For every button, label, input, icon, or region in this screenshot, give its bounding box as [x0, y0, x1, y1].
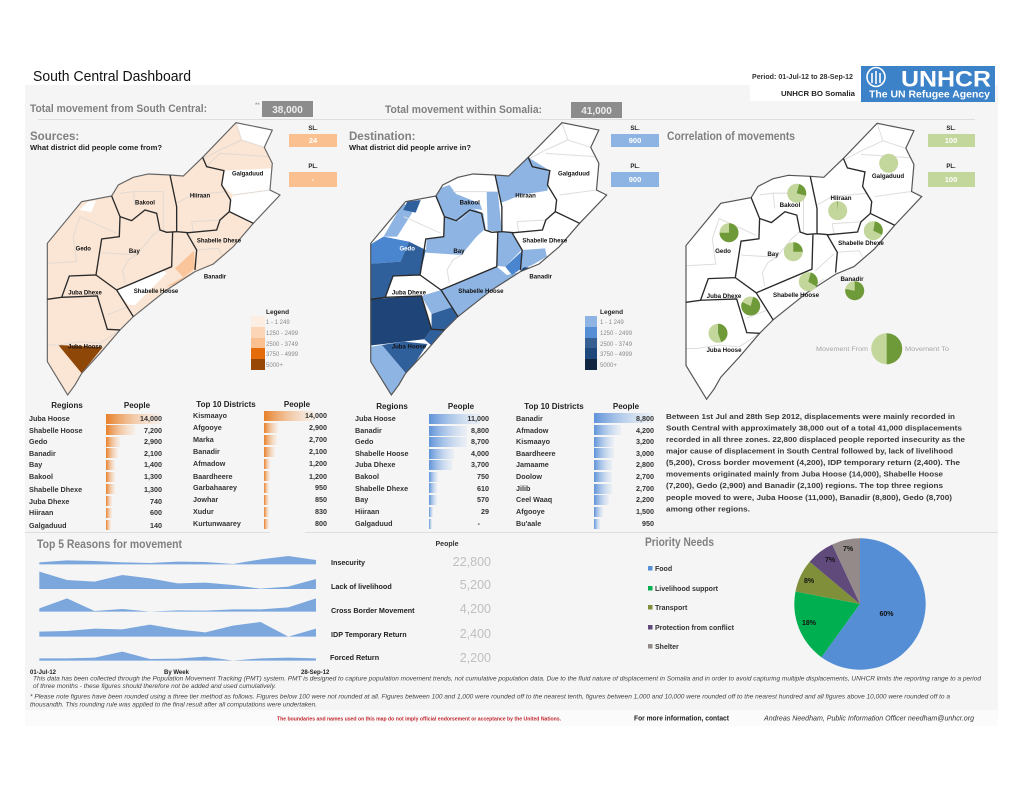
map: destination: Shabelle Dhexe	[522, 238, 568, 244]
table: source regions: People	[124, 401, 151, 410]
map: sources: Shabelle Dhexe	[197, 238, 242, 244]
contact information	[634, 714, 974, 722]
table: destination districts: Banadir	[516, 414, 543, 423]
summary paragraph: recorded in all three zones. 22,800 displaced people reported insecurity as the	[666, 435, 965, 444]
summary paragraph	[666, 412, 965, 514]
map: sources: Bakool	[135, 201, 155, 207]
table: destination districts: Ceel Waaq	[516, 495, 552, 504]
contact information: Andreas Needham, Public Information Officer needham@unhcr.org	[763, 716, 974, 722]
heading: top 5 reasons: Top 5 Reasons for movement	[37, 539, 182, 551]
total movement from South Central: 38,000	[272, 105, 303, 116]
table: source districts	[193, 400, 327, 529]
map legend: sources: 5000+	[266, 363, 283, 369]
table: destination districts: Jamaame	[516, 460, 549, 469]
table: source regions: 14,000	[140, 414, 162, 423]
table: source districts: Afgooye	[193, 423, 222, 432]
table: source districts: 14,000	[305, 411, 327, 420]
map legend: sources: 3750 - 4999	[266, 352, 299, 358]
priority needs legend: Transport	[655, 605, 688, 612]
correlation map labels: Shabelle Hoose	[773, 292, 820, 299]
table: destination districts: 950	[642, 519, 654, 528]
table: source districts: Marka	[193, 435, 215, 444]
table: destination districts: Afgooye	[516, 507, 545, 516]
map: destination: Bakool	[460, 201, 480, 207]
correlation map labels: Hiiraan	[831, 195, 852, 202]
summary paragraph: people moved to were, Juba Hoose (11,000), Banadir (8,800), Gedo (8,700)	[666, 493, 953, 502]
priority needs legend: Food	[655, 566, 672, 573]
table: destination districts: 2,800	[636, 460, 654, 469]
footnotes: of three months - these figures should therefore not be added and used cumulatively.	[33, 683, 276, 690]
stat boxes: correlation	[928, 126, 975, 187]
table: destination districts: Jilib	[516, 484, 531, 493]
table: destination districts: Doolow	[516, 472, 542, 481]
stat boxes: sources: PL.	[308, 164, 318, 170]
correlation map labels: Juba Dhexe	[707, 293, 742, 300]
table: source districts: 1,200	[309, 472, 327, 481]
stat boxes: destination: 900	[629, 136, 641, 145]
total movement from South Central: Total movement from South Central:	[30, 103, 207, 115]
map: destination: Shabelle Hoose	[458, 289, 504, 295]
map: destination: Bay	[453, 249, 465, 255]
table: destination regions: 8,800	[471, 426, 489, 435]
priority needs legend: Shelter	[655, 644, 679, 651]
reasons labels and values: People	[436, 541, 459, 548]
total movement within Somalia: 41,000	[581, 106, 612, 117]
map: sources: Juba Hoose	[68, 345, 103, 351]
pie chart: priority needs: 18%	[802, 620, 817, 627]
table: source districts: 830	[315, 507, 327, 516]
dashboard background	[25, 65, 998, 726]
correlation map labels: Gedo	[715, 248, 731, 255]
reasons labels and values: 4,200	[460, 602, 491, 616]
correlation map labels	[706, 173, 904, 354]
table: source regions: Regions	[51, 401, 83, 410]
pie chart: priority needs: 7%	[825, 557, 836, 564]
stat boxes: sources: 24	[309, 136, 318, 145]
map legend: destination	[585, 309, 633, 370]
stat boxes: destination: SL.	[630, 126, 640, 132]
sparkline axis labels: By Week	[164, 670, 190, 676]
table: source regions: 7,200	[144, 426, 162, 435]
reasons labels and values: Forced Return	[330, 653, 379, 662]
table: destination districts: 8,800	[636, 414, 654, 423]
map legend: sources: 1 - 1 249	[266, 320, 290, 326]
heading: priority needs: Priority Needs	[645, 535, 714, 549]
table: source regions: Banadir	[29, 449, 56, 458]
correlation map labels: Galgaduud	[872, 173, 904, 180]
table: source regions	[29, 401, 162, 530]
sparkline axis labels: 01-Jul-12	[30, 670, 57, 676]
table: destination regions: Bay	[355, 495, 368, 504]
table: source regions: Galgaduud	[29, 521, 67, 530]
map legend: sources	[251, 309, 299, 370]
table: source districts: Kurtunwaarey	[193, 519, 241, 528]
map: sources	[47, 123, 280, 395]
correlation map labels: Bakool	[780, 202, 801, 209]
map legend: sources: Legend	[266, 309, 289, 316]
UNHCR logo: UNHCR	[901, 66, 991, 92]
table: destination regions: 4,000	[471, 449, 489, 458]
reporting period: Period: 01-Jul-12 to 28-Sep-12	[752, 74, 853, 81]
table: source regions: Gedo	[29, 437, 48, 446]
table: source regions: 740	[150, 497, 162, 506]
heading: sources: What district did people come from?	[30, 145, 162, 152]
heading: destination: What district did people arrive in?	[349, 145, 471, 152]
pie chart: priority needs	[794, 538, 926, 670]
map: sources: Bay	[129, 249, 140, 255]
title: South Central Dashboard	[33, 69, 191, 85]
map disclaimer: The boundaries and names used on this map do not imply official endorsement or acceptance by the United Nations.	[277, 716, 562, 722]
table: source regions: 1,400	[144, 460, 162, 469]
correlation map labels: Shabelle Dhexe	[838, 240, 884, 247]
map: destination: Juba Dhexe	[392, 290, 427, 296]
sparkline axis labels	[30, 670, 330, 676]
table: source regions: Shabelle Dhexe	[29, 485, 82, 494]
footnotes: thousandth. This rounding rule was applied to the final result after all computations were undertaken.	[30, 702, 317, 708]
table: source regions: 1,300	[144, 472, 162, 481]
map: destination: Gedo	[399, 246, 415, 252]
table: destination districts: 2,200	[636, 495, 654, 504]
table: source districts: People	[284, 400, 311, 409]
stat boxes: correlation: 100	[945, 175, 957, 184]
table: destination districts: 2,700	[636, 484, 654, 493]
table: destination regions	[355, 402, 489, 529]
stat boxes: correlation: 100	[945, 136, 957, 145]
pie legend: movement from / to: Movement To	[905, 346, 949, 353]
summary paragraph: South Central with approximately 38,000 out of a total 41,000 displacements	[666, 424, 962, 432]
map legend: destination: 2500 - 3749	[600, 342, 633, 348]
table: source districts: Afmadow	[193, 459, 226, 468]
stat boxes: sources	[289, 126, 337, 187]
map legend: sources: 2500 - 3749	[266, 342, 299, 348]
summary paragraph: movements originated mainly from Juba Hoose (14,000), Shabelle Hoose	[666, 470, 943, 478]
table: source regions: Bay	[29, 460, 42, 469]
table: destination regions: Juba Hoose	[355, 414, 396, 423]
map legend: destination: 1 - 1 249	[600, 320, 624, 326]
table: destination districts: Top 10 Districts	[524, 402, 584, 411]
table: source regions: 140	[150, 521, 162, 530]
table: destination districts: People	[613, 402, 640, 411]
office name: UNHCR BO Somalia	[781, 89, 856, 98]
table: source districts: Kismaayo	[193, 411, 228, 420]
table: destination regions: Regions	[376, 402, 408, 411]
table: source districts: Baardheere	[193, 472, 233, 481]
table: destination districts: 1,500	[636, 507, 654, 516]
table: source regions: Juba Dhexe	[29, 497, 69, 506]
map legend: sources: 1250 - 2499	[266, 331, 299, 337]
map legend: destination: 3750 - 4999	[600, 352, 633, 358]
map legend: destination: 1250 - 2499	[600, 331, 633, 337]
stat boxes: destination: PL.	[630, 164, 640, 170]
map: destination: Banadir	[529, 275, 553, 281]
table: destination regions: Banadir	[355, 426, 382, 435]
pie chart: priority needs: 7%	[843, 546, 854, 553]
table: source districts: Garbahaarey	[193, 483, 237, 492]
priority needs legend	[648, 566, 735, 651]
heading: sources	[30, 131, 162, 152]
reasons labels and values: Insecurity	[331, 558, 365, 567]
table: destination regions: People	[448, 402, 475, 411]
table: source regions: 600	[150, 508, 162, 517]
table: destination districts: 2,700	[636, 472, 654, 481]
table: destination regions: Juba Dhexe	[355, 460, 395, 469]
total movement from South Central: **	[255, 103, 260, 109]
total movement within Somalia: Total movement within Somalia:	[385, 104, 542, 116]
sparkline axis labels: 28-Sep-12	[301, 670, 330, 676]
table: destination districts: Bu'aale	[516, 519, 541, 528]
table: destination regions: Gedo	[355, 437, 374, 446]
table: source regions: Juba Hoose	[29, 414, 70, 423]
reasons labels and values: IDP Temporary Return	[331, 630, 407, 639]
correlation map labels: Bay	[767, 251, 779, 258]
map: destination: Galgaduud	[558, 171, 590, 177]
table: destination districts: 4,200	[636, 426, 654, 435]
total movement from South Central	[30, 101, 313, 117]
table: source regions: 1,300	[144, 485, 162, 494]
table: source districts: 1,200	[309, 459, 327, 468]
stat boxes: correlation: SL.	[946, 126, 956, 132]
table: source districts: 800	[315, 519, 327, 528]
table: destination regions: 570	[477, 495, 489, 504]
table: destination regions: Bakool	[355, 472, 379, 481]
pie chart: priority needs: 60%	[879, 611, 894, 618]
map: destination: Hiiraan	[515, 193, 536, 199]
table: source districts: Top 10 Districts	[196, 400, 256, 409]
reasons labels and values: 22,800	[453, 555, 491, 569]
correlation pies	[708, 154, 898, 343]
table: source regions: Bakool	[29, 472, 53, 481]
map: sources: Galgaduud	[232, 171, 264, 177]
table: destination districts: 3,200	[636, 437, 654, 446]
table: source districts: 850	[315, 495, 327, 504]
contact information: For more information, contact	[634, 714, 729, 722]
summary paragraph: (7,200), Gedo (2,900) and Banadir (2,100) regions. The top three regions	[666, 481, 943, 490]
map: sources: Gedo	[76, 246, 91, 252]
pie legend: movement from / to	[816, 333, 949, 364]
map: correlation of movements	[686, 123, 922, 399]
table: destination regions: 610	[477, 484, 489, 493]
table: source districts: 2,900	[309, 423, 327, 432]
stat boxes: destination	[611, 126, 659, 187]
table: source districts: Jowhar	[193, 495, 218, 504]
reasons labels and values: 2,400	[460, 627, 491, 641]
table: source regions: Hiiraan	[29, 508, 53, 517]
table: source districts: Banadir	[193, 447, 220, 456]
table: destination regions: 11,000	[467, 414, 489, 423]
pie chart: priority needs: 8%	[804, 578, 815, 585]
table: destination districts: Baardheere	[516, 449, 556, 458]
UNHCR logo: The UN Refugee Agency	[869, 90, 990, 100]
summary paragraph: major cause of displacement in South Central followed by, lack of livelihood	[666, 446, 953, 456]
priority needs legend: Protection from conflict	[655, 625, 735, 632]
table: destination regions: Shabelle Dhexe	[355, 484, 408, 493]
table: destination regions: Hiiraan	[355, 507, 379, 516]
table: destination regions: 750	[477, 472, 489, 481]
reasons labels and values: 5,200	[460, 578, 491, 592]
table: destination regions: 29	[481, 507, 489, 516]
table: destination regions: 3,700	[471, 460, 489, 469]
stat boxes: sources: SL.	[308, 126, 318, 132]
table: destination regions: 8,700	[471, 437, 489, 446]
UNHCR logo	[861, 66, 995, 102]
heading: destination	[349, 131, 471, 152]
table: destination districts: Afmadow	[516, 426, 549, 435]
summary paragraph: among other regions.	[666, 504, 750, 514]
sparklines: reasons by week	[39, 556, 316, 661]
heading: destination: Destination:	[349, 131, 415, 143]
stat boxes: correlation: PL.	[946, 164, 956, 170]
map: destination: Juba Hoose	[392, 345, 427, 351]
reasons labels and values: Lack of livelihood	[331, 582, 392, 591]
map: sources: Hiiraan	[190, 193, 210, 199]
footnotes: This data has been collected through the Population Movement Tracking (PMT) system. PMT is designed to capture population movement trends, not cumulative population data. Due to the fluid nature of displacement in Somalia and in order to avoid capturing multiple displacements, UNHCR limits the reporting range to a period	[33, 676, 982, 682]
correlation map labels: Juba Hoose	[706, 347, 742, 354]
heading: sources: Sources:	[30, 131, 79, 143]
table: source regions: Shabelle Hoose	[29, 426, 83, 435]
reasons labels and values	[330, 541, 491, 665]
pie legend: movement from / to: Movement From	[816, 346, 868, 353]
table: source regions: 2,900	[144, 437, 162, 446]
footnotes	[30, 676, 982, 708]
heading: correlation: Correlation of movements	[667, 131, 795, 143]
table: source districts: Xudur	[193, 507, 214, 516]
table: source districts: 950	[315, 483, 327, 492]
summary paragraph: Between 1st Jul and 28th Sep 2012, displacements were mainly recorded in	[666, 412, 955, 421]
correlation map labels: Banadir	[840, 276, 864, 283]
table: destination regions: Shabelle Hoose	[355, 449, 409, 458]
stat boxes: destination: 900	[629, 175, 641, 184]
priority needs legend: Livelihood support	[655, 586, 719, 593]
map: sources: Juba Dhexe	[68, 290, 102, 296]
map: destination	[367, 123, 607, 397]
footnotes: * Please note figures have been rounded using a three tier method as follows. Figures below 100 were not rounded at all. Figures between 100 and 1,000 were rounded off to the nearest tenth, figures between 1,000 and 10,000 were rounded off to the nearest hundred and all figures above 10,000 were rounded off to a	[30, 694, 951, 700]
table: destination regions: Galgaduud	[355, 519, 393, 528]
table: destination districts: 3,000	[636, 449, 654, 458]
map legend: destination: Legend	[600, 309, 623, 316]
table: source regions: 2,100	[144, 449, 162, 458]
table: destination districts	[516, 402, 654, 529]
reasons labels and values: Cross Border Movement	[331, 606, 415, 615]
table: source districts: 2,100	[309, 447, 327, 456]
map legend: destination: 5000+	[600, 363, 617, 369]
table: destination regions: -	[478, 519, 481, 528]
reasons labels and values: 2,200	[460, 651, 491, 665]
summary paragraph: (5,200), Cross border movement (4,200), IDP temporary return (2,400). The	[666, 458, 960, 467]
table: destination districts: Kismaayo	[516, 437, 551, 446]
map: sources: Banadir	[204, 275, 227, 281]
stat boxes: sources: -	[312, 175, 315, 184]
total movement within Somalia	[385, 102, 622, 118]
table: source districts: 2,700	[309, 435, 327, 444]
map: sources: Shabelle Hoose	[134, 289, 179, 295]
